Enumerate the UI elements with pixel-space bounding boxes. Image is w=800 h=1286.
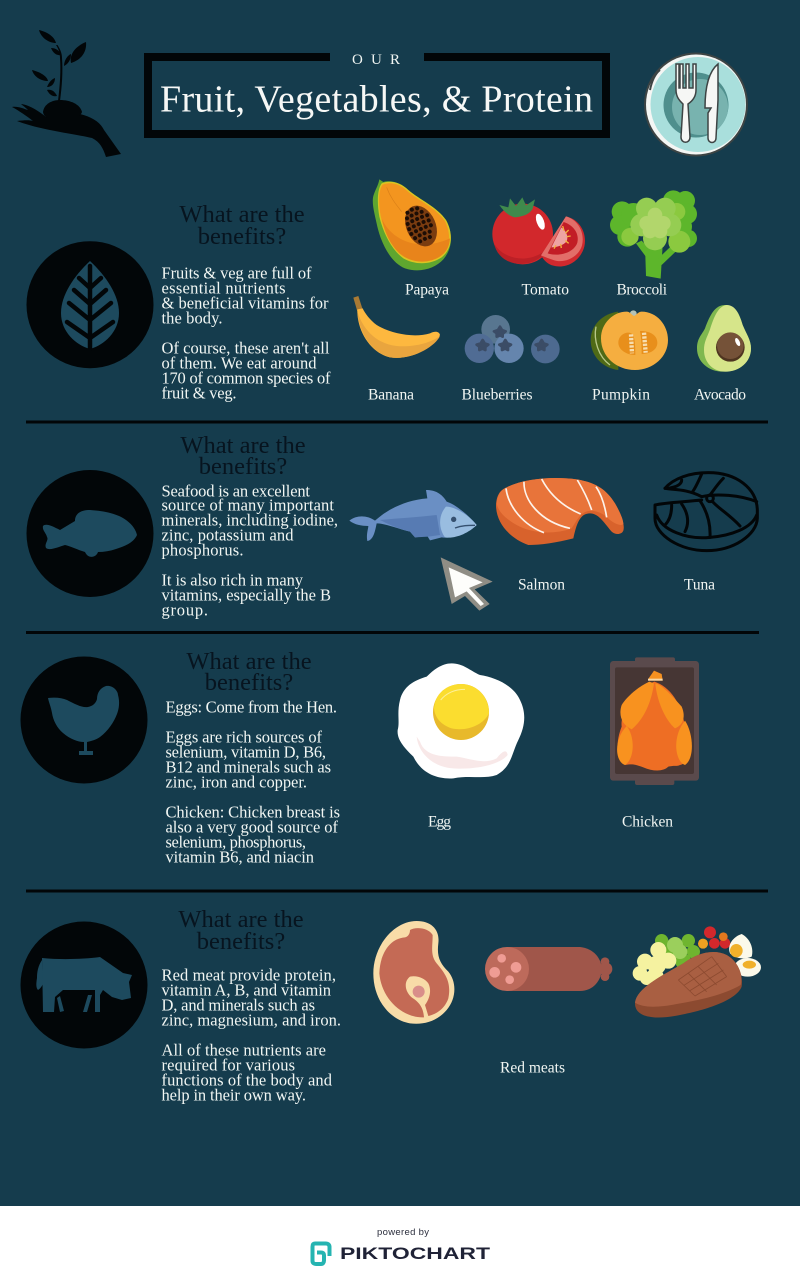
icon: ham steak — [373, 921, 454, 1024]
icon: blueberries — [465, 315, 560, 363]
divider — [26, 420, 768, 424]
icon: salami — [485, 947, 612, 991]
icon: cow in circle — [20, 922, 148, 1048]
labels: fruit and vegetables — [368, 282, 746, 404]
heading — [178, 906, 304, 955]
body text: functions of the body and — [162, 1071, 333, 1090]
labels: fruit and vegetables: Avocado — [694, 387, 746, 404]
illustrations: seafood — [349, 473, 757, 611]
body text: essential nutrients — [162, 279, 286, 298]
body text: Red meat provide protein, — [162, 966, 336, 985]
body text: phosphorus. — [162, 541, 244, 560]
body text: vitamin B6, and niacin — [166, 848, 314, 867]
body text: All of these nutrients are — [162, 1041, 326, 1060]
illustrations: fruit and vegetables — [353, 179, 751, 372]
labels: fruit and vegetables: Tomato — [522, 282, 569, 299]
heading: benefits? — [198, 223, 286, 250]
body text: also a very good source of — [166, 818, 338, 837]
icon: leaf in circle — [26, 241, 154, 368]
labels: fruit and vegetables: Pumpkin — [592, 387, 650, 404]
body text: Eggs: Come from the Hen. — [166, 698, 337, 717]
icon: hand holding sprout — [12, 30, 121, 157]
logo icon — [312, 1244, 330, 1264]
icon: tomato — [492, 197, 585, 267]
powered by text: powered by — [377, 1227, 429, 1238]
body text: vitamin A, B, and vitamin — [162, 981, 331, 1000]
heading: benefits? — [197, 928, 285, 955]
heading: benefits? — [199, 453, 287, 480]
labels: fruit and vegetables: Banana — [368, 387, 414, 404]
heading: What are the — [180, 432, 306, 459]
body text: Fruits & veg are full of — [162, 264, 312, 283]
label: red meats: Red meats — [500, 1060, 565, 1077]
logo wordmark: PIKTOCHART — [340, 1244, 491, 1263]
icon: steak plate — [633, 926, 761, 1018]
body text: D, and minerals such as — [162, 996, 315, 1015]
illustrations: eggs and chicken — [398, 657, 699, 785]
body text: source of many important — [162, 496, 334, 515]
divider — [26, 631, 759, 634]
icon: fried egg — [398, 663, 524, 778]
illustrations: red meat — [373, 921, 761, 1024]
body text: 170 of common species of — [162, 369, 331, 388]
body text: Chicken: Chicken breast is — [166, 803, 340, 822]
icon: cursor — [441, 557, 493, 611]
section: seafood — [26, 432, 757, 620]
icon: roast chicken on tray — [610, 657, 699, 785]
body text: fruit & veg. — [162, 384, 236, 403]
icon: hen in circle — [20, 656, 148, 784]
labels: fruit and vegetables: Blueberries — [462, 387, 532, 404]
body text: vitamins, especially the B — [162, 586, 331, 605]
body text: zinc, potassium and — [162, 526, 294, 545]
body text — [162, 264, 331, 403]
body text: the body. — [162, 309, 222, 328]
icon: fish in circle — [26, 470, 154, 597]
body text: help in their own way. — [162, 1086, 306, 1105]
icon: avocado — [697, 305, 751, 372]
body text: zinc, magnesium, and iron. — [162, 1011, 341, 1030]
body text: Of course, these aren't all — [162, 339, 330, 358]
icon: salmon — [496, 478, 624, 545]
icon: pumpkin — [591, 310, 668, 370]
body text — [166, 698, 340, 867]
labels: fruit and vegetables: Broccoli — [616, 282, 668, 299]
heading: What are the — [186, 648, 312, 675]
body text: group. — [162, 601, 208, 620]
heading: benefits? — [205, 669, 293, 696]
heading — [180, 432, 306, 480]
section: red meat — [20, 906, 761, 1105]
labels: fruit and vegetables: Papaya — [405, 282, 449, 299]
fork — [676, 64, 696, 142]
body text — [162, 966, 341, 1105]
knife — [705, 64, 718, 142]
labels: eggs and chicken: Egg — [428, 814, 451, 831]
icon: blue fish — [349, 490, 477, 541]
icon: broccoli — [610, 190, 697, 279]
body text: minerals, including iodine, — [162, 511, 338, 530]
icon: plate with fork and knife — [644, 52, 748, 156]
body text: zinc, iron and copper. — [166, 773, 307, 792]
section: eggs and chicken — [20, 648, 699, 867]
icon: papaya — [373, 179, 451, 270]
labels: seafood — [518, 577, 715, 594]
icon: banana — [353, 296, 440, 358]
heading: What are the — [179, 201, 305, 228]
body text: of them. We eat around — [162, 354, 317, 373]
title text: Fruit, Vegetables, & Protein — [160, 78, 593, 120]
labels: eggs and chicken: Chicken — [622, 814, 673, 831]
icon: tuna outline — [655, 473, 757, 551]
body text: B12 and minerals such as — [166, 758, 331, 777]
body text: It is also rich in many — [162, 571, 304, 590]
body text — [162, 482, 338, 620]
heading — [186, 648, 312, 696]
labels: seafood: Salmon — [518, 577, 565, 594]
title eyebrow: OUR — [352, 52, 400, 68]
footer: powered by Piktochart — [0, 1206, 800, 1286]
body text: & beneficial vitamins for — [162, 294, 329, 313]
body text: selenium, vitamin D, B6, — [166, 743, 326, 762]
section: fruit and vegetables — [26, 179, 751, 404]
body text: selenium, phosphorus, — [166, 833, 306, 852]
labels: seafood: Tuna — [684, 577, 715, 594]
divider — [26, 890, 768, 892]
body text: required for various — [162, 1056, 295, 1075]
title banner — [144, 52, 610, 138]
heading: What are the — [178, 906, 304, 933]
body text: Eggs are rich sources of — [166, 728, 322, 747]
labels: eggs and chicken — [428, 814, 673, 831]
body text: Seafood is an excellent — [162, 482, 310, 501]
heading — [179, 201, 305, 250]
